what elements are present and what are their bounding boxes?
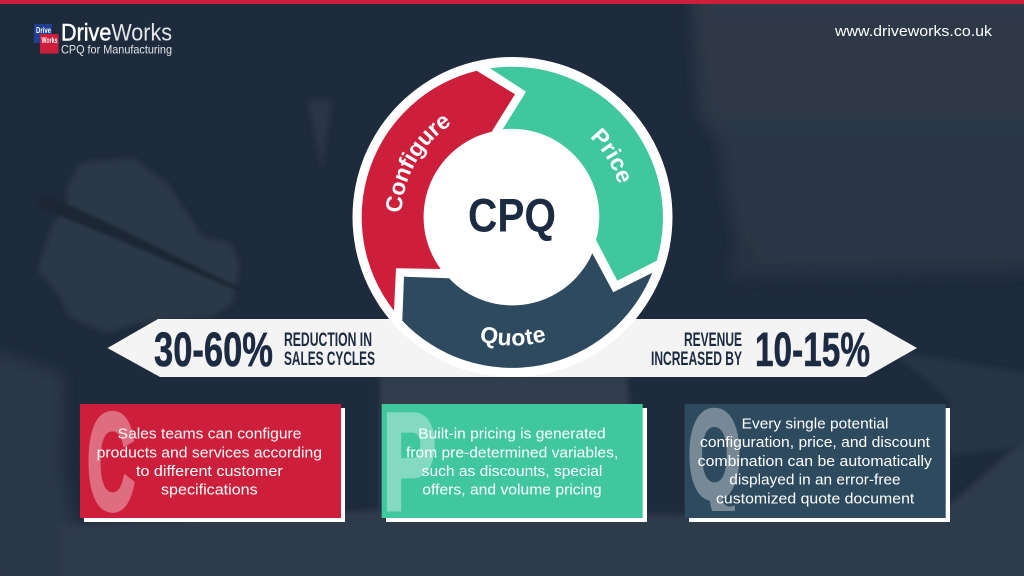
logo: DriveWorks: Works — [42, 36, 58, 45]
card text: specifications — [161, 483, 258, 499]
card text: configuration, price, and discount — [700, 435, 930, 451]
card text: products and services according — [97, 445, 322, 461]
website url: www.driveworks.co.uk — [834, 23, 993, 40]
logo: DriveWorks: DriveWorks — [61, 20, 172, 46]
card text: Every single potential — [742, 416, 888, 432]
segment: Configure: Configure — [386, 116, 450, 212]
card text: from pre-determined variables, — [406, 445, 618, 461]
card text: displayed in an error-free — [729, 473, 901, 489]
label: revenue increased by: INCREASED BY — [651, 348, 742, 370]
big letter P: P — [383, 386, 436, 539]
label: reduction in sales cycles: SALES CYCLES — [284, 348, 375, 370]
CPQ cycle diagram — [352, 57, 672, 377]
card text: offers, and volume pricing — [422, 483, 602, 499]
white circle base — [352, 57, 672, 377]
card text: to different customer — [136, 464, 283, 480]
card text — [698, 416, 933, 507]
card text: such as discounts, special — [422, 464, 602, 480]
card: Price — [382, 386, 647, 539]
segment: Price — [490, 66, 663, 281]
center label: CPQ: CPQ — [468, 188, 556, 242]
card text: customized quote document — [716, 491, 914, 507]
segment: Configure — [362, 70, 515, 311]
big letter Q: Q — [688, 386, 741, 525]
logo: DriveWorks: Drive — [36, 26, 51, 35]
label: revenue increased by — [651, 329, 742, 370]
top red bar — [0, 0, 1024, 4]
logo: DriveWorks — [34, 20, 172, 56]
card text — [406, 426, 618, 499]
label: revenue increased by: REVENUE — [684, 329, 742, 351]
card text: Built-in pricing is generated — [418, 426, 606, 442]
segment: Quote: Quote — [481, 327, 546, 348]
card text: combination can be automatically — [698, 454, 933, 470]
right stat block — [651, 324, 870, 377]
segment: Price: Price — [590, 128, 629, 183]
label: reduction in sales cycles — [284, 329, 375, 370]
stat: 30-60%: 30-60% — [154, 324, 273, 377]
segment: Quote — [402, 253, 652, 368]
card: Configure: C — [87, 386, 135, 539]
card text — [97, 426, 322, 499]
stat: 10-15%: 10-15% — [755, 324, 870, 377]
banner arrow: two-headed band behind the cycle — [108, 319, 917, 377]
card: Quote — [684, 404, 950, 522]
card: Configure — [80, 386, 345, 539]
left stat block — [154, 324, 375, 377]
logo: DriveWorks: CPQ for Manufacturing — [61, 42, 172, 56]
card text: Sales teams can configure — [118, 426, 301, 442]
label: reduction in sales cycles: REDUCTION IN — [284, 329, 372, 351]
